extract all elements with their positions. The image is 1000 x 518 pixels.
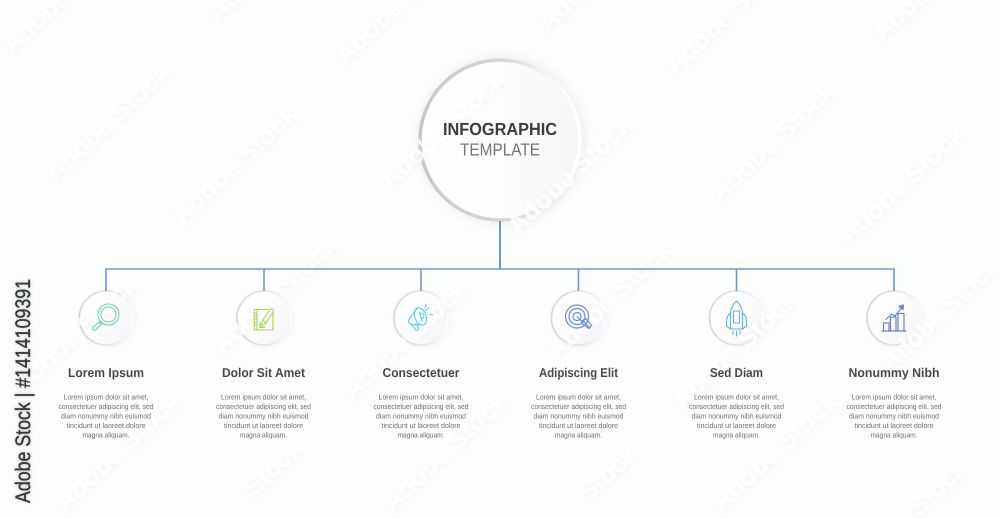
step 6 text: magna aliquam.: [870, 430, 918, 440]
watermarks: Adobe Stock: [542, 235, 678, 365]
icon: target: [566, 305, 592, 328]
step 3 text: tincidunt ut laoreet dolore: [382, 421, 460, 430]
step 3 text: consectetuer adipiscing elit, sed: [374, 402, 468, 411]
step 1 text: consectetuer adipiscing elit, sed: [58, 402, 154, 411]
step 3 text: Consectetuer: [382, 365, 460, 380]
watermarks: Adobe Stock: [7, 270, 143, 400]
icon: magnifier: [92, 304, 119, 330]
central circle: [420, 60, 580, 220]
step 6 text: Lorem ipsum dolor sit amet,: [852, 392, 936, 402]
step 6 text: diam nonummy nibh euismod: [849, 412, 939, 420]
step 1 text: magna aliquam.: [82, 430, 130, 440]
step 3 text: magna aliquam.: [398, 430, 444, 440]
watermarks: Adobe Stock: [377, 387, 513, 517]
watermarks: Adobe Stock: [707, 387, 843, 517]
step 2 text: tincidunt ut laoreet dolore: [224, 421, 303, 430]
step 2 text: diam nonummy nibh euismod: [218, 412, 308, 420]
step 6 text: Nonummy Nibh: [848, 365, 940, 380]
watermarks: Adobe Stock: [50, 387, 186, 517]
watermarks: Adobe Stock: [40, 58, 176, 188]
title: TEMPLATE: [460, 140, 540, 160]
step 5 text: magna aliquam.: [713, 430, 760, 440]
step 2 text: Lorem ipsum dolor sit amet,: [221, 392, 306, 402]
step circle: target: [552, 291, 606, 345]
stock id vertical label: Adobe Stock | #1414109391: [12, 279, 35, 503]
step 1 text: Lorem Ipsum: [68, 365, 144, 380]
step 4 text: tincidunt ut laoreet dolore: [539, 421, 618, 430]
step 4 text: [531, 365, 626, 440]
step 4 text: magna aliquam.: [555, 430, 602, 440]
connector lines: [106, 221, 894, 291]
step 6 text: consectetuer adipiscing elit, sed: [846, 402, 942, 411]
step 4 text: Adipiscing Elit: [539, 365, 619, 380]
step 2 text: [216, 365, 311, 440]
step 4 text: Lorem ipsum dolor sit amet,: [536, 392, 621, 402]
step 5 text: Sed Diam: [710, 365, 763, 380]
step 5 text: [689, 365, 784, 440]
step 1 text: diam nonummy nibh euismod: [61, 412, 151, 420]
step 6 text: tincidunt ut laoreet dolore: [854, 421, 934, 430]
icon: bar chart: [882, 305, 906, 331]
step circle: megaphone: [394, 291, 448, 345]
icon: megaphone: [409, 304, 432, 330]
step 6 text: [846, 365, 942, 440]
step 4 text: diam nonummy nibh euismod: [534, 412, 624, 420]
watermarks: Adobe Stock: [167, 100, 303, 230]
step 1 text: [58, 365, 154, 440]
watermarks: Adobe Stock: [705, 77, 841, 207]
step 5 text: tincidunt ut laoreet dolore: [697, 421, 776, 430]
step circle: search: [79, 291, 133, 345]
step 2 text: Dolor Sit Amet: [222, 365, 306, 380]
watermarks: Adobe Stock: [834, 120, 970, 250]
step 3 text: [374, 365, 468, 440]
step 5 text: Lorem ipsum dolor sit amet,: [694, 392, 779, 402]
step 2 text: consectetuer adipiscing elit, sed: [216, 402, 311, 411]
step circle: chart: [867, 291, 921, 345]
step 1 text: tincidunt ut laoreet dolore: [66, 421, 146, 430]
watermarks: Adobe Stock: [502, 110, 638, 240]
icon: notepad: [254, 309, 273, 330]
step 3 text: Lorem ipsum dolor sit amet,: [378, 392, 464, 402]
step 5 text: diam nonummy nibh euismod: [692, 412, 782, 420]
watermarks: Adobe Stock: [375, 65, 511, 195]
icon: rocket: [726, 301, 746, 336]
watermarks: Adobe Stock: [207, 230, 343, 360]
step 4 text: consectetuer adipiscing elit, sed: [531, 402, 626, 411]
title: [443, 119, 557, 160]
step circle: notes: [237, 291, 291, 345]
step 2 text: magna aliquam.: [240, 430, 287, 440]
watermarks: Stock: [574, 440, 643, 507]
step 1 text: Lorem ipsum dolor sit amet,: [64, 392, 148, 402]
watermarks: Adobe Stock: [337, 275, 473, 405]
step 3 text: diam nonummy nibh euismod: [376, 412, 466, 420]
watermarks: Adobe Stock: [667, 285, 803, 415]
step 5 text: consectetuer adipiscing elit, sed: [689, 402, 784, 411]
step circle: rocket: [710, 291, 764, 345]
title: INFOGRAPHIC: [443, 119, 557, 139]
watermarks: Stock: [239, 435, 308, 502]
